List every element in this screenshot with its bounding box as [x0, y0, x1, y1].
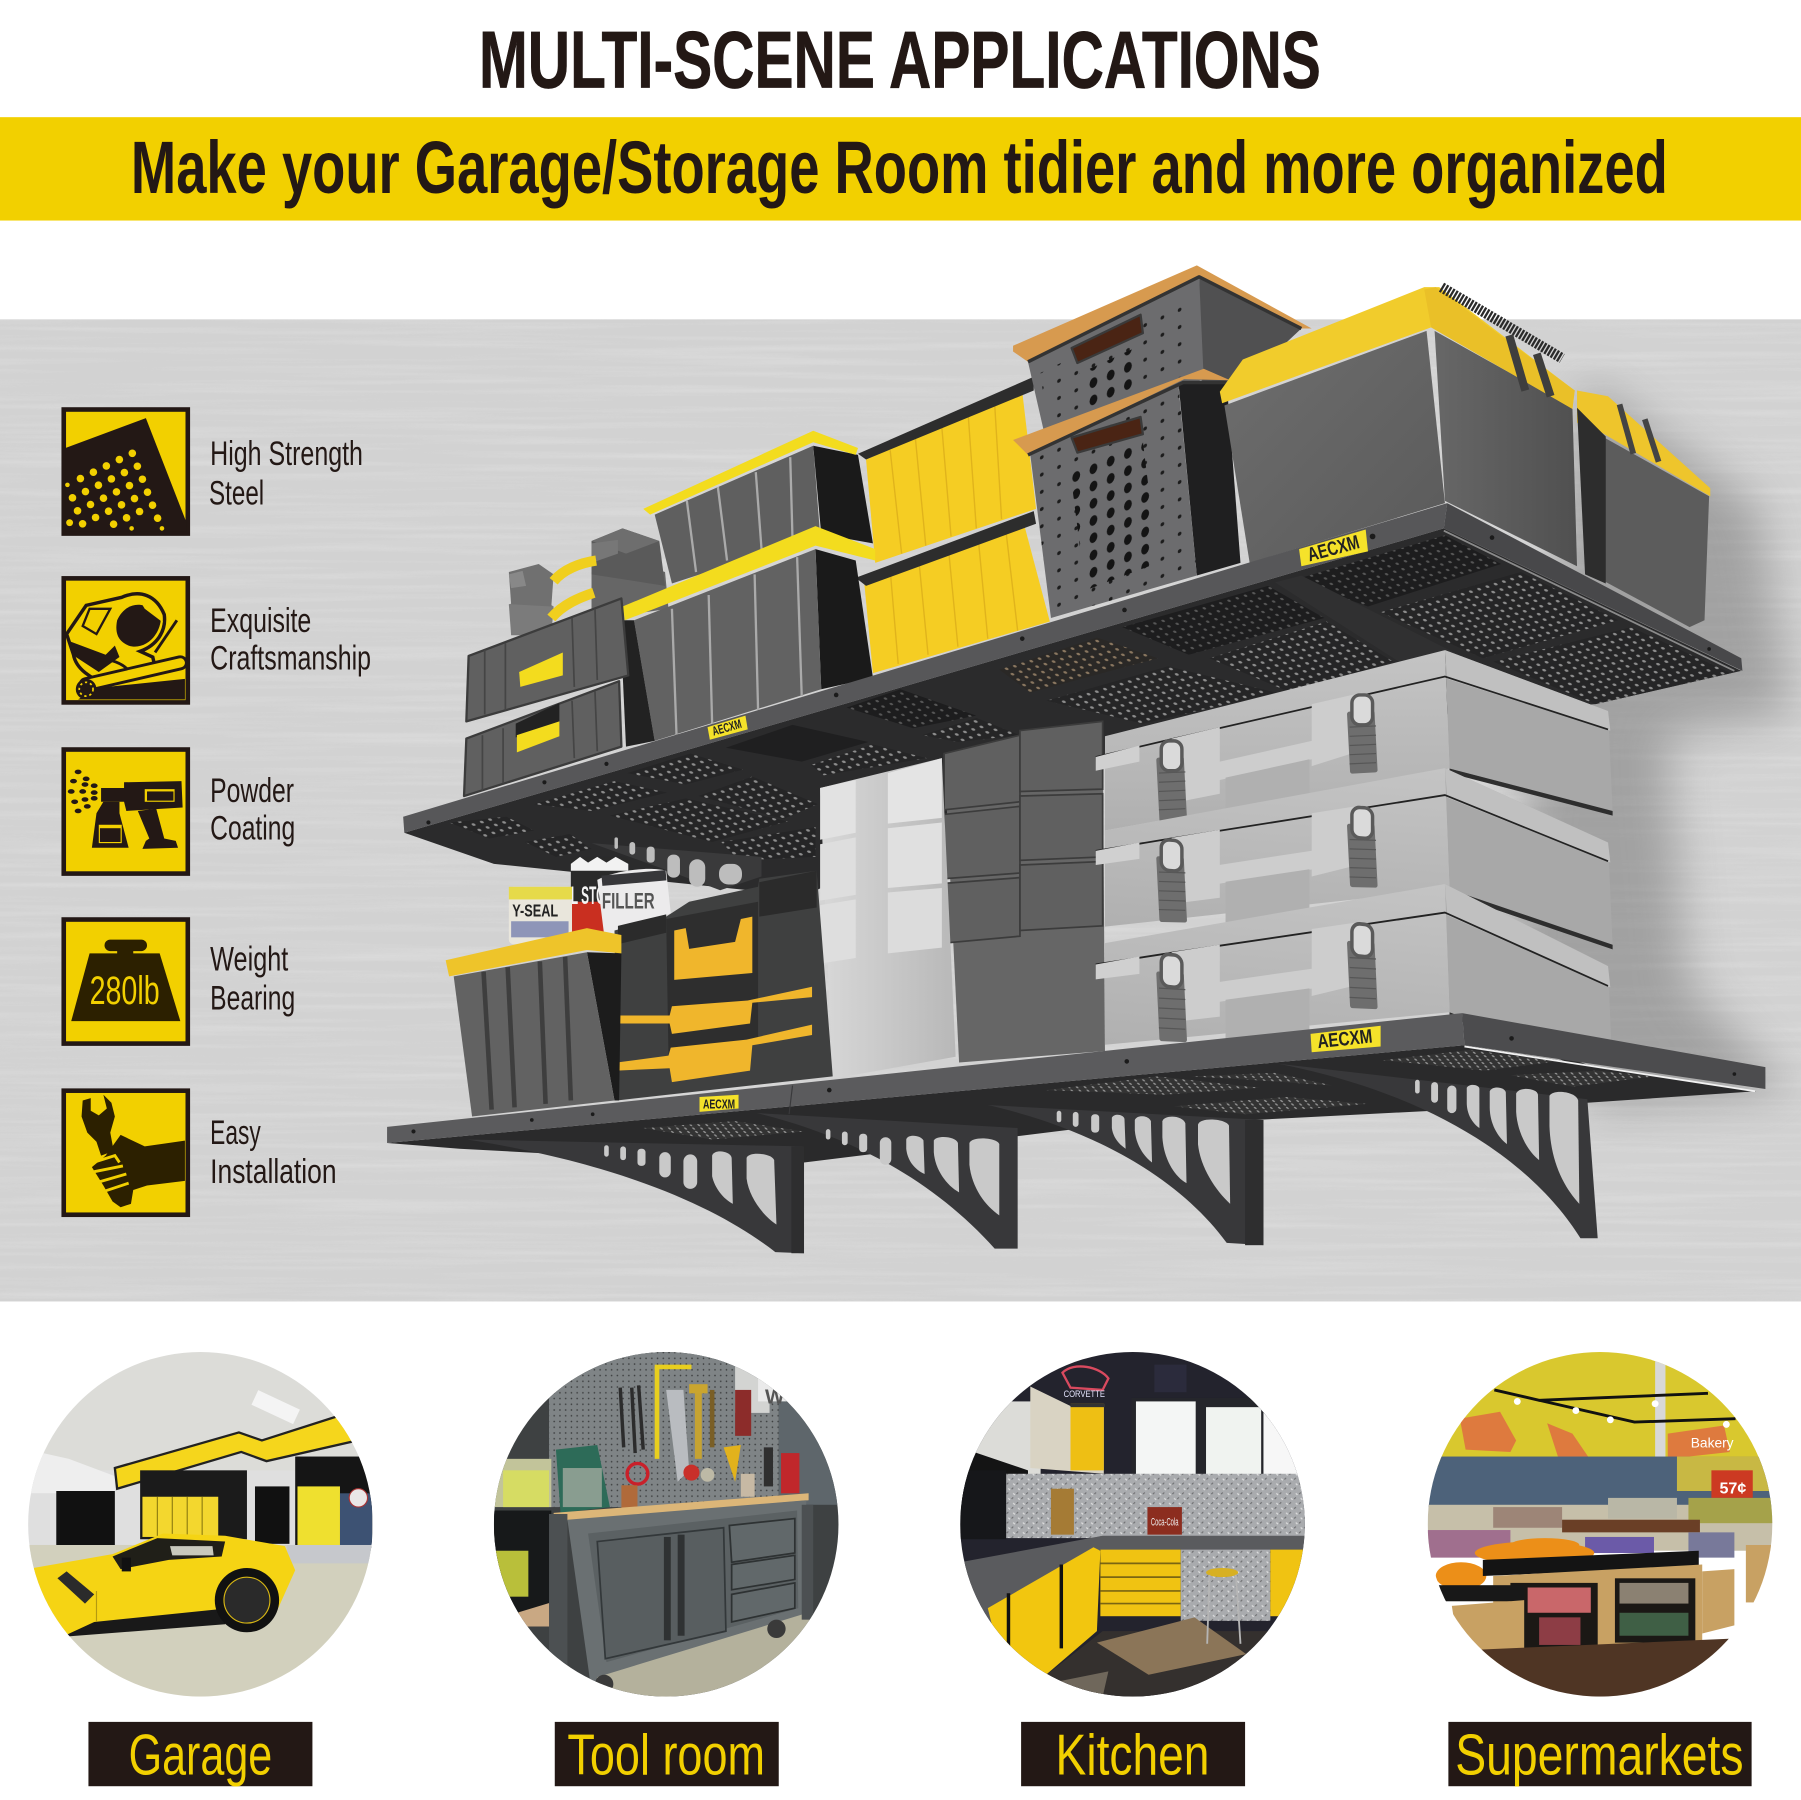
main front edge: [403, 503, 1447, 833]
dark tool chest with yellow trays: [614, 871, 833, 1100]
lower shelf items: [446, 650, 1613, 1117]
light grey case top: [1096, 650, 1613, 831]
yellow bin bottom: [856, 511, 1050, 673]
cross beam: [1275, 575, 1459, 672]
label: weight bearing: Weight: [210, 941, 289, 979]
brand tag: AECXM lower left: [699, 1095, 739, 1112]
photo circle: kitchen: [960, 1352, 1306, 1697]
label: easy installation: [210, 1114, 337, 1191]
yellow bin top: [858, 377, 1036, 563]
paint can: yellow label: Y-SEAL: [512, 901, 558, 921]
drawer box top: [466, 598, 628, 721]
title: MULTI-SCENE APPLICATIONS: [479, 15, 1321, 105]
label: high strength steel: Steel: [209, 474, 264, 512]
label: exquisite craftsmanship: Craftsmanship: [210, 640, 371, 678]
wall bracket 4: [1278, 1064, 1598, 1238]
light grey case bottom: [1096, 849, 1613, 1096]
photo circle: tool room: WO: [765, 1386, 801, 1409]
right side edge: [1444, 503, 1742, 671]
yellow subtitle banner: [0, 117, 1801, 221]
perforated basket top with wooden lid: [1013, 265, 1312, 442]
paint can: red label: [571, 857, 628, 933]
photo circle: kitchen: CORVETTE: [1064, 1389, 1105, 1399]
photo circle: supermarket: [1428, 1352, 1773, 1697]
label: kitchen: Kitchen: [1056, 1724, 1209, 1788]
screw holes: [426, 534, 1711, 825]
wall bracket 2: [757, 1113, 1018, 1249]
light grey case middle: [1096, 742, 1613, 965]
lower shelf: [387, 1013, 1765, 1253]
upper shelf bracket with holes: [592, 837, 762, 890]
brand tag: AECXM lower right: AECXM: [1316, 1025, 1373, 1053]
icon: 280lb weight bearing: 280lb: [90, 968, 160, 1013]
label: easy installation: Installation: [210, 1153, 337, 1191]
light grey stacked box: [819, 758, 956, 1079]
photo circle: garage: [28, 1352, 373, 1697]
upper shelf stored items: [464, 265, 1710, 796]
brand tag: AECXM upper right: AECXM: [1305, 531, 1362, 566]
brand tag: AECXM upper left: AECXM: [711, 717, 743, 739]
icon: powder coating spray gun: [64, 750, 188, 874]
label: weight bearing: [210, 941, 295, 1018]
label: powder coating: [210, 772, 295, 848]
black bin with yellow lid bottom: [620, 526, 875, 747]
screw holes: [411, 1036, 1736, 1134]
label: high strength steel: [209, 435, 363, 512]
brand tag: AECXM lower left: AECXM: [703, 1097, 735, 1111]
small grey boxes with yellow straps: [509, 528, 668, 635]
main front edge: [387, 1013, 1464, 1143]
perforated panels: [449, 535, 1731, 860]
icon: 280lb weight bearing: [64, 920, 188, 1044]
photo circle: kitchen: Coca-Cola: [1151, 1516, 1179, 1528]
underside: [387, 1045, 1756, 1162]
drawer box bottom: [464, 681, 621, 796]
label: powder coating: Coating: [210, 810, 295, 848]
icon: welder craftsmanship: [64, 578, 188, 702]
icon: hand with wrench easy installation: [64, 1091, 188, 1215]
label: powder coating: Powder: [210, 772, 294, 810]
black bin with yellow lid top: [643, 431, 873, 584]
large grey box with yellow lid: [1220, 287, 1577, 566]
wall bracket 1: [467, 1140, 804, 1253]
upper shelf: [403, 503, 1742, 896]
paint can: red label: L STO: [571, 882, 605, 910]
perforated basket bottom with wooden lid: [1013, 369, 1240, 618]
paint can: filler: [597, 869, 671, 935]
wall bracket 3: [988, 1105, 1263, 1245]
far right grey box with yellow lid: [1577, 391, 1710, 627]
label: easy installation: Easy: [210, 1114, 261, 1152]
grey bin with yellow lid: [446, 928, 621, 1117]
photo circle: tool room: [494, 1352, 840, 1697]
label: exquisite craftsmanship: Exquisite: [210, 602, 311, 640]
photo circle: supermarket: Bakery: [1691, 1435, 1734, 1450]
label: exquisite craftsmanship: [210, 602, 371, 678]
label: weight bearing: Bearing: [210, 980, 295, 1018]
paint cans: [509, 857, 671, 944]
brand tag: AECXM upper left: [708, 716, 748, 740]
paint can: yellow label: [509, 887, 572, 944]
photo circle: supermarket: 57¢: [1719, 1479, 1746, 1497]
label: garage: Garage: [129, 1724, 272, 1788]
underside: [404, 528, 1741, 896]
dark grey stacked box: [944, 721, 1105, 1063]
panel: concrete wall with shelf product: [0, 319, 1801, 1301]
label: tool room: Tool room: [567, 1724, 765, 1788]
icon: high strength steel: [64, 410, 188, 534]
right side edge: [1462, 1013, 1765, 1089]
paint can: filler: FILLER: [602, 889, 655, 914]
lit perforated panels: [643, 1050, 1654, 1140]
label: high strength steel: High Strength: [210, 435, 363, 473]
